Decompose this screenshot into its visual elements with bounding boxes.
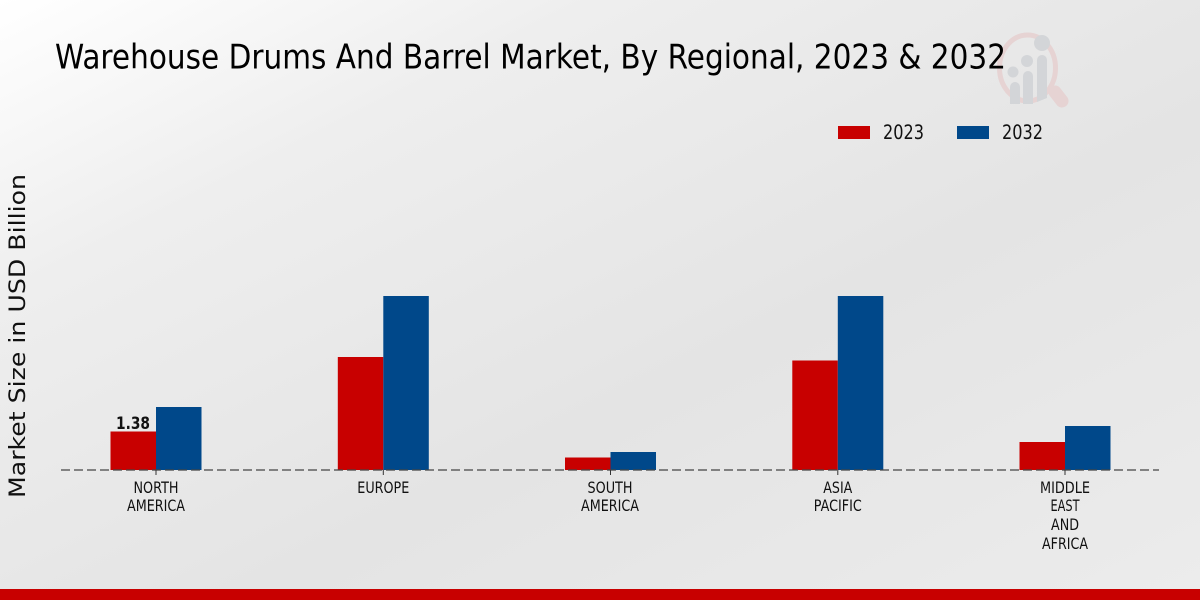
bar chart	[110, 296, 1110, 470]
x label: South America	[581, 478, 639, 515]
x label: Europe: EUROPE	[357, 478, 409, 497]
footer bar	[0, 589, 1200, 600]
x label: Middle East and Africa: MIDDLE	[1040, 478, 1090, 497]
x label: North America	[127, 478, 185, 515]
x label: South America: AMERICA	[581, 496, 639, 515]
x axis baseline	[61, 469, 1159, 471]
legend item: 2023	[838, 121, 924, 144]
x label: Middle East and Africa: EAST	[1050, 496, 1080, 515]
x label: South America: SOUTH	[588, 478, 632, 497]
x label: Asia Pacific: ASIA	[823, 478, 852, 497]
bars: Middle East and Africa	[1020, 426, 1110, 470]
x label: Middle East and Africa: AFRICA	[1042, 534, 1088, 553]
bars: North America	[110, 407, 202, 470]
x label: North America: NORTH	[134, 478, 178, 497]
x label: Asia Pacific	[814, 478, 862, 515]
x label: Asia Pacific: PACIFIC	[814, 496, 862, 515]
x label: North America: AMERICA	[127, 496, 185, 515]
bars: South America	[565, 452, 656, 470]
x label: Middle East and Africa	[1040, 478, 1090, 553]
y axis label: Market Size in USD Billion	[5, 174, 31, 498]
bars: Europe	[338, 296, 429, 470]
title: Warehouse Drums And Barrel Market, By Regional, 2023 & 2032	[55, 38, 1006, 76]
x label: Middle East and Africa: AND	[1051, 515, 1079, 534]
icon: watermark logo magnifier with bars	[1000, 35, 1062, 104]
legend item: 2032: 2032	[1002, 121, 1043, 144]
legend	[838, 121, 1043, 144]
data label: 1.38	[116, 414, 150, 433]
legend item: 2032	[957, 121, 1043, 144]
legend item: 2023: 2023	[883, 121, 924, 144]
bars: Asia Pacific	[792, 296, 883, 470]
